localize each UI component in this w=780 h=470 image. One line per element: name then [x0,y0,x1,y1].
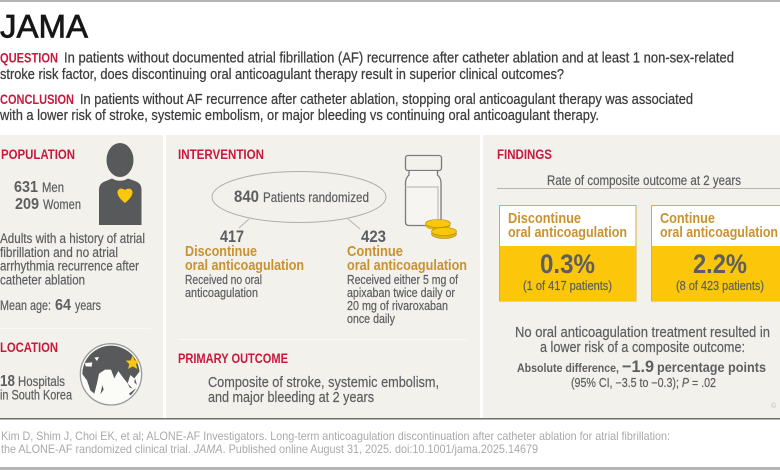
continue arm: oral anticoagulation [347,257,467,274]
population description: fibrillation and no atrial [0,245,118,260]
population description: arrhythmia recurrence after [0,258,139,274]
mean age [0,297,101,314]
discontinue arm: oral anticoagulation [185,257,304,274]
findings summary: Absolute difference, [517,361,619,375]
discontinue arm: 417 [220,228,244,246]
JAMA logo: JAMA [0,8,89,44]
findings heading: FINDINGS [497,147,552,162]
primary outcome text [208,375,439,406]
icon: pill bottle [406,156,456,238]
findings summary: −1.9 [622,357,654,376]
men and women counts: 631 [14,179,38,196]
discontinue arm: anticoagulation [185,286,258,300]
mean age: Mean age: [0,298,51,313]
result card: continue: 2.2% [693,249,747,279]
primary outcome text: and major bleeding at 2 years [208,390,374,406]
result card: discontinue: oral anticoagulation [508,224,627,241]
continue arm [347,228,467,326]
hospitals: in South Korea [0,388,72,402]
hospitals [0,373,72,402]
primary outcome heading: PRIMARY OUTCOME [178,351,288,366]
intervention heading: INTERVENTION [178,147,264,162]
findings summary: a lower risk of a composite outcome: [540,340,745,356]
icon: person with heart [99,143,142,225]
primary outcome text: Composite of stroke, systemic embolism, [208,375,439,391]
mean age: years [75,298,101,313]
citation: Kim D, Shim J, Choi EK, et al; ALONE-AF Investigators. Long-term anticoagulation discontinuation after catheter ablation for atrial fibrillation: [1,429,670,443]
result card: continue: Continue [660,210,715,227]
result card: discontinue: Discontinue [508,210,581,227]
conclusion [0,92,693,124]
citation [1,429,670,456]
randomized ellipse: 840 [234,187,259,206]
hospitals: 18 [0,373,15,390]
chart title: Rate of composite outcome at 2 years [547,173,741,188]
continue arm: apixaban twice daily or [347,286,455,300]
continue arm: Received either 5 mg of [347,273,458,287]
citation: the ALONE-AF randomized clinical trial. JAMA. Published online August 31, 2025. doi:10.1001/jama.2025.14679 [1,442,538,456]
result card: discontinue [500,206,636,301]
question: stroke risk factor, does discontinuing oral anticoagulant therapy result in superior clinical outcomes? [0,67,564,83]
findings summary: (95% CI, −3.5 to −0.3); P = .02 [571,376,716,390]
result card: continue: (8 of 423 patients) [676,279,764,293]
conclusion: with a lower risk of stroke, systemic embolism, or major bleeding vs continuing oral anticoagulant therapy. [0,108,599,124]
continue arm: 423 [361,228,386,246]
continue arm: 20 mg of rivaroxaban [347,299,448,313]
discontinue arm: Received no oral [185,273,262,287]
findings summary [515,325,770,390]
question [0,50,734,83]
panel: intervention and outcome [166,135,480,418]
result card: continue [652,206,780,301]
discontinue arm: Discontinue [185,243,257,260]
panel: findings [483,135,780,418]
result card: discontinue: (1 of 417 patients) [523,279,612,293]
question: QUESTION [0,50,58,66]
population description: Adults with a history of atrial [0,231,145,246]
hospitals: Hospitals [18,374,65,389]
population heading: POPULATION [1,147,75,162]
men and women counts: 209 [15,196,39,213]
conclusion: CONCLUSION [0,92,74,107]
panel: population and location [0,135,163,418]
discontinue arm [185,228,304,300]
conclusion: In patients without AF recurrence after catheter ablation, stopping oral anticoagulant therapy was associated [80,92,693,108]
randomized ellipse [212,172,386,229]
randomized ellipse: Patients randomized [263,190,369,205]
continue arm: Continue [347,243,403,260]
mean age: 64 [55,297,71,314]
population description [0,231,145,288]
continue arm: once daily [347,312,396,326]
men and women counts [14,179,81,213]
result card: discontinue: 0.3% [540,249,595,279]
men and women counts: Men [42,180,64,195]
population description: catheter ablation [0,272,85,288]
icon: globe with star [80,343,142,406]
location heading: LOCATION [0,340,58,355]
findings summary: percentage points [657,359,766,375]
men and women counts: Women [43,197,81,212]
copyright mark: © [771,402,777,410]
